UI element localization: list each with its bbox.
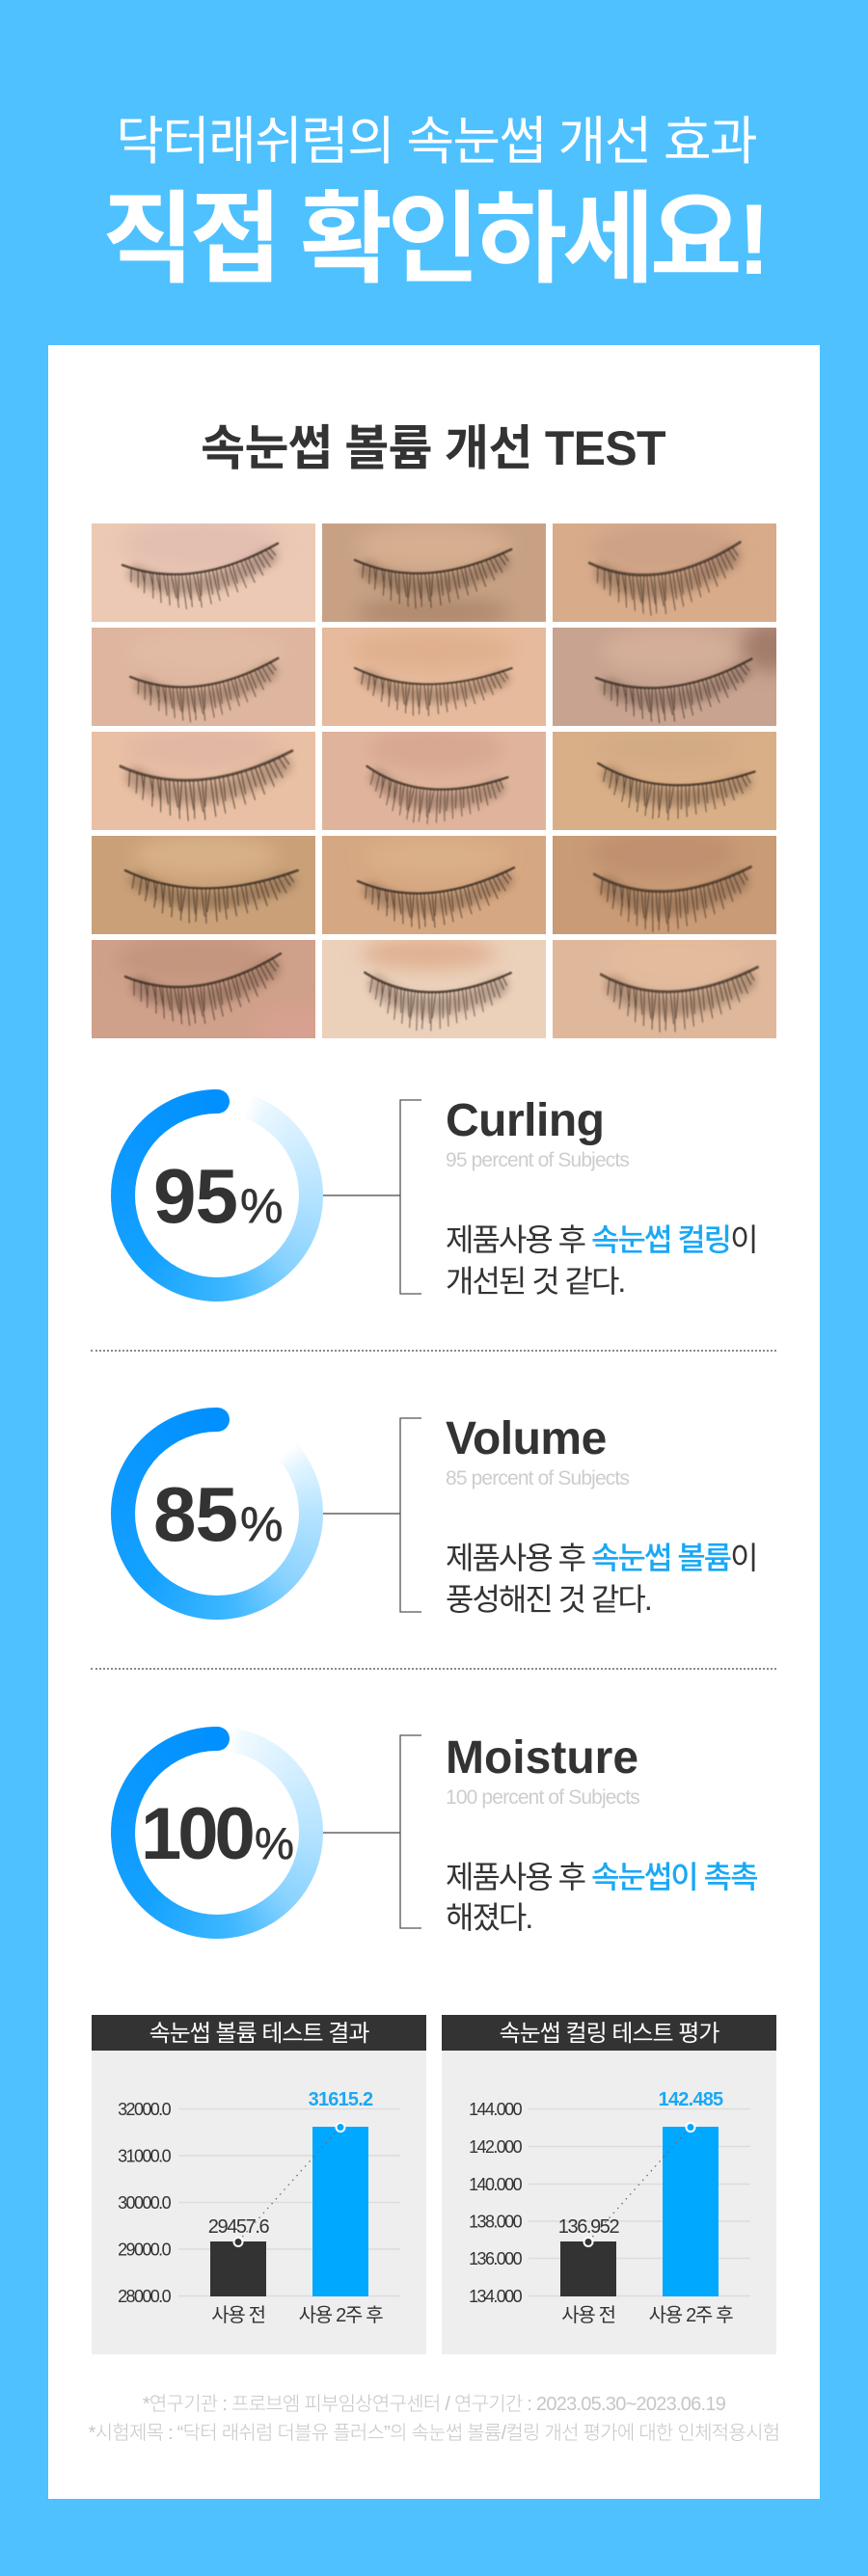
photo r1c2 [322,523,546,622]
y axis labels [469,2100,523,2306]
y axis labels: 140.000 [469,2175,523,2194]
y axis labels: 29000.0 [118,2241,172,2260]
chart header: 속눈썹 볼륨 테스트 결과 [149,2021,369,2047]
divider 1 [91,1350,776,1352]
photo r5c3 [553,940,776,1038]
moisture description: 해졌다. [446,1900,531,1935]
value 95 [153,1153,282,1239]
moisture description: 제품사용 후 속눈썹이 촉촉 [446,1860,757,1894]
value labels [208,2089,373,2238]
moisture text and bracket [141,1732,758,1935]
value 85: 85 [153,1471,237,1557]
x axis labels [211,2304,383,2326]
photo r2c3 [553,628,776,726]
curling description [446,1222,757,1299]
photo r2c1 [92,628,315,726]
title line 1: 닥터래쉬럼의 속눈썹 개선 효과 [116,113,756,171]
volume heading: Volume [446,1413,607,1464]
chart header [92,2015,426,2051]
moisture subtitle: 100 percent of Subjects [446,1786,639,1809]
title line 2: 직접 확인하세요! [102,184,766,296]
curling heading: Curling [446,1095,604,1146]
photo r5c2 [322,940,546,1038]
stat: volume [111,1408,757,1620]
y axis labels: 31000.0 [118,2146,172,2165]
x axis labels: 사용 2주 후 [649,2304,733,2326]
value labels: 31615.2 [309,2089,373,2110]
photo r4c1 [92,836,315,934]
value labels: 136.952 [558,2216,620,2238]
curling description: 개선된 것 같다. [446,1264,624,1299]
trend line and points [584,2123,694,2246]
title [102,113,766,296]
chart: curling result [442,2015,776,2354]
trend line and points [233,2123,345,2246]
photo r2c2 [322,628,546,726]
photo r5c1 [92,940,315,1038]
footnote: *연구기관 : 프로브엠 피부임상연구센터 / 연구기간 : 2023.05.30~2023.06.19 [143,2393,726,2415]
y axis labels: 28000.0 [118,2287,172,2306]
chart: volume result [92,2015,426,2354]
value labels: 142.485 [659,2089,723,2110]
volume description: 제품사용 후 속눈썹 볼륨이 [446,1541,757,1575]
y axis labels [118,2100,172,2306]
volume description [446,1541,757,1617]
chart header [442,2015,776,2051]
curling text and bracket [153,1095,757,1299]
value 85 [153,1471,282,1557]
bars [210,2127,368,2296]
photo r4c2 [322,836,546,934]
value 100: 100 [141,1793,254,1875]
bars [560,2127,719,2296]
charts [92,2015,776,2354]
photo r1c1 [92,523,315,622]
x axis labels: 사용 전 [561,2304,615,2326]
x axis labels: 사용 2주 후 [299,2304,383,2326]
x axis labels: 사용 전 [211,2304,265,2326]
volume description: 풍성해진 것 같다. [446,1582,651,1617]
stat: moisture [111,1727,758,1939]
curling description: 제품사용 후 속눈썹 컬링이 [446,1222,757,1257]
y axis labels: 32000.0 [118,2100,172,2119]
photo r3c2 [322,732,546,830]
y axis labels: 142.000 [469,2137,523,2157]
curling subtitle: 95 percent of Subjects [446,1149,629,1171]
moisture heading: Moisture [446,1732,638,1784]
photo r3c3 [553,732,776,830]
section heading: 속눈썹 볼륨 개선 TEST [201,421,665,475]
value labels: 29457.6 [208,2216,270,2238]
eyelash photo grid [92,523,776,1038]
x axis labels [561,2304,733,2326]
y axis labels: 144.000 [469,2100,523,2119]
value labels [558,2089,723,2238]
volume text and bracket [153,1413,757,1617]
photo r1c3 [553,523,776,622]
y axis labels: 30000.0 [118,2193,172,2213]
photo r4c3 [553,836,776,934]
stat: curling [111,1089,757,1301]
moisture description [446,1860,757,1935]
divider 2 [91,1668,776,1670]
y axis labels: 138.000 [469,2212,523,2231]
value 85: % [240,1497,282,1551]
white panel [48,345,820,2499]
value 95: 95 [153,1153,237,1239]
volume subtitle: 85 percent of Subjects [446,1467,629,1489]
chart header: 속눈썹 컬링 테스트 평가 [500,2021,719,2047]
y axis labels: 134.000 [469,2287,523,2306]
y axis labels: 136.000 [469,2249,523,2268]
footnote [89,2393,779,2444]
footnote: *시험제목 : “닥터 래쉬럼 더블유 플러스”의 속눈썹 볼륨/컬링 개선 평가에 대한 인체적용시험 [89,2422,779,2444]
value 100: % [255,1818,293,1868]
donut 95 percent [111,1089,323,1301]
donut 85 percent [111,1408,323,1620]
photo r3c1 [92,732,315,830]
value 95: % [240,1179,282,1233]
donut 100 percent [111,1727,323,1939]
